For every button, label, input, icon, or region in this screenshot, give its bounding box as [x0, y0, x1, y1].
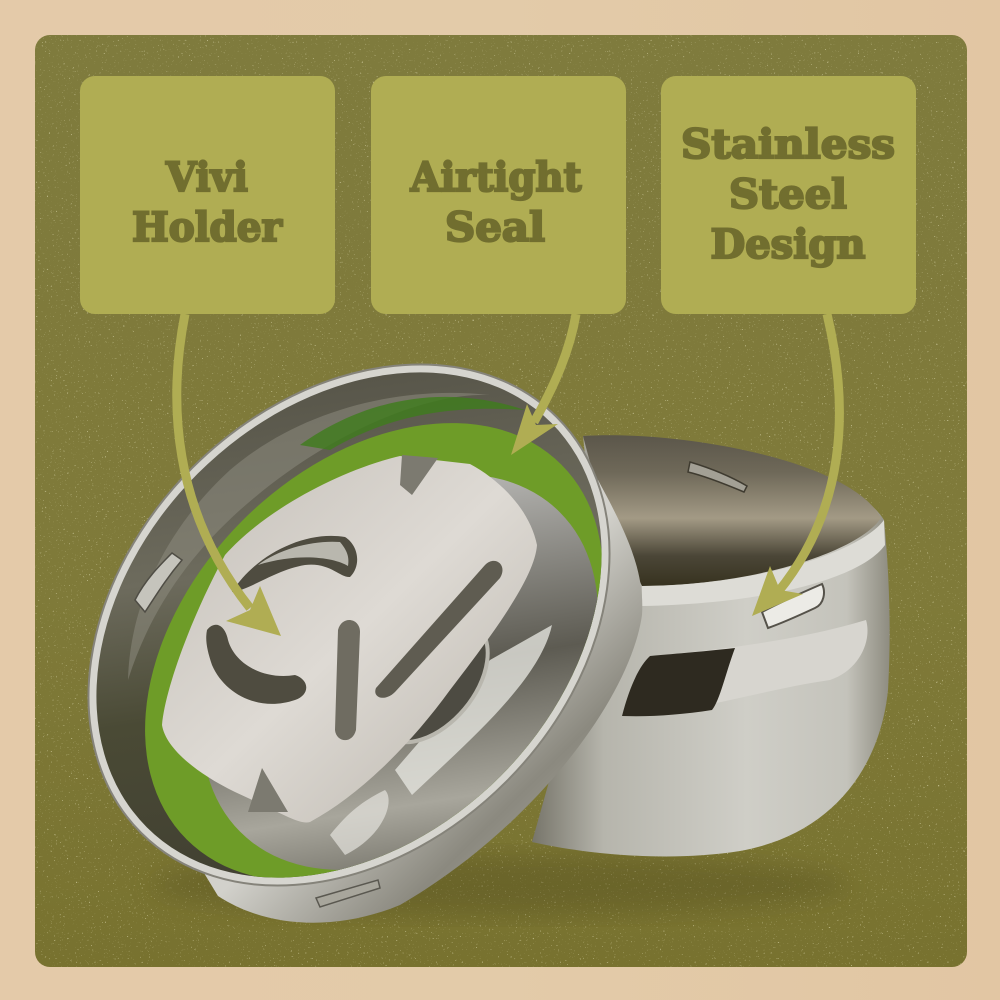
product: open stainless steel container — [88, 364, 890, 924]
bowl upper band highlight — [622, 620, 868, 716]
label box: Stainless Steel Design: Stainless — [681, 121, 895, 168]
lid outer wall — [190, 480, 642, 923]
label box: Airtight Seal: Airtight — [410, 154, 582, 201]
label box: Stainless Steel Design: Design — [710, 221, 866, 268]
label box: Airtight Seal — [371, 76, 626, 314]
arrow: to Stainless Steel — [752, 314, 839, 616]
arrow: to Vivi Holder — [177, 314, 281, 636]
disc highlights — [395, 625, 552, 795]
lid inner wall — [0, 271, 703, 979]
bowl body — [532, 436, 890, 856]
disc centre boss — [406, 640, 490, 744]
label box: Vivi Holder: Vivi — [165, 154, 248, 201]
plate cutout: long slot — [375, 561, 502, 698]
inner metal disc — [208, 476, 598, 870]
plate cutout highlight — [258, 542, 348, 566]
bowl interior — [583, 435, 881, 586]
plate cutout: short slot — [335, 620, 360, 740]
lid interior: seal and disc, clipped to the rim — [145, 423, 602, 878]
bowl dark reflection — [622, 648, 735, 716]
label box: Airtight Seal: Seal — [445, 204, 545, 251]
green reflection on wall — [300, 397, 525, 450]
plate cutout: curved C — [206, 536, 357, 704]
disc lower highlight — [330, 790, 389, 855]
label box: Vivi Holder — [80, 76, 335, 314]
inner wall reflections — [128, 393, 490, 680]
label box: Stainless Steel Design: Steel — [729, 171, 847, 218]
bowl slot handle — [762, 584, 824, 628]
lid slot left — [135, 553, 182, 612]
vivi holder plate with cutouts — [162, 456, 537, 823]
plate tabs — [248, 455, 438, 812]
green silicone seal — [145, 423, 602, 878]
lid rim — [0, 260, 714, 990]
label box: Vivi Holder: Holder — [132, 204, 283, 251]
bowl inner slot — [688, 462, 747, 492]
lid slot bottom — [316, 880, 380, 907]
label box: Stainless Steel Design — [661, 76, 916, 314]
arrow: to Airtight Seal — [511, 314, 576, 455]
bowl rim — [642, 520, 885, 606]
shadow under product — [150, 855, 850, 915]
